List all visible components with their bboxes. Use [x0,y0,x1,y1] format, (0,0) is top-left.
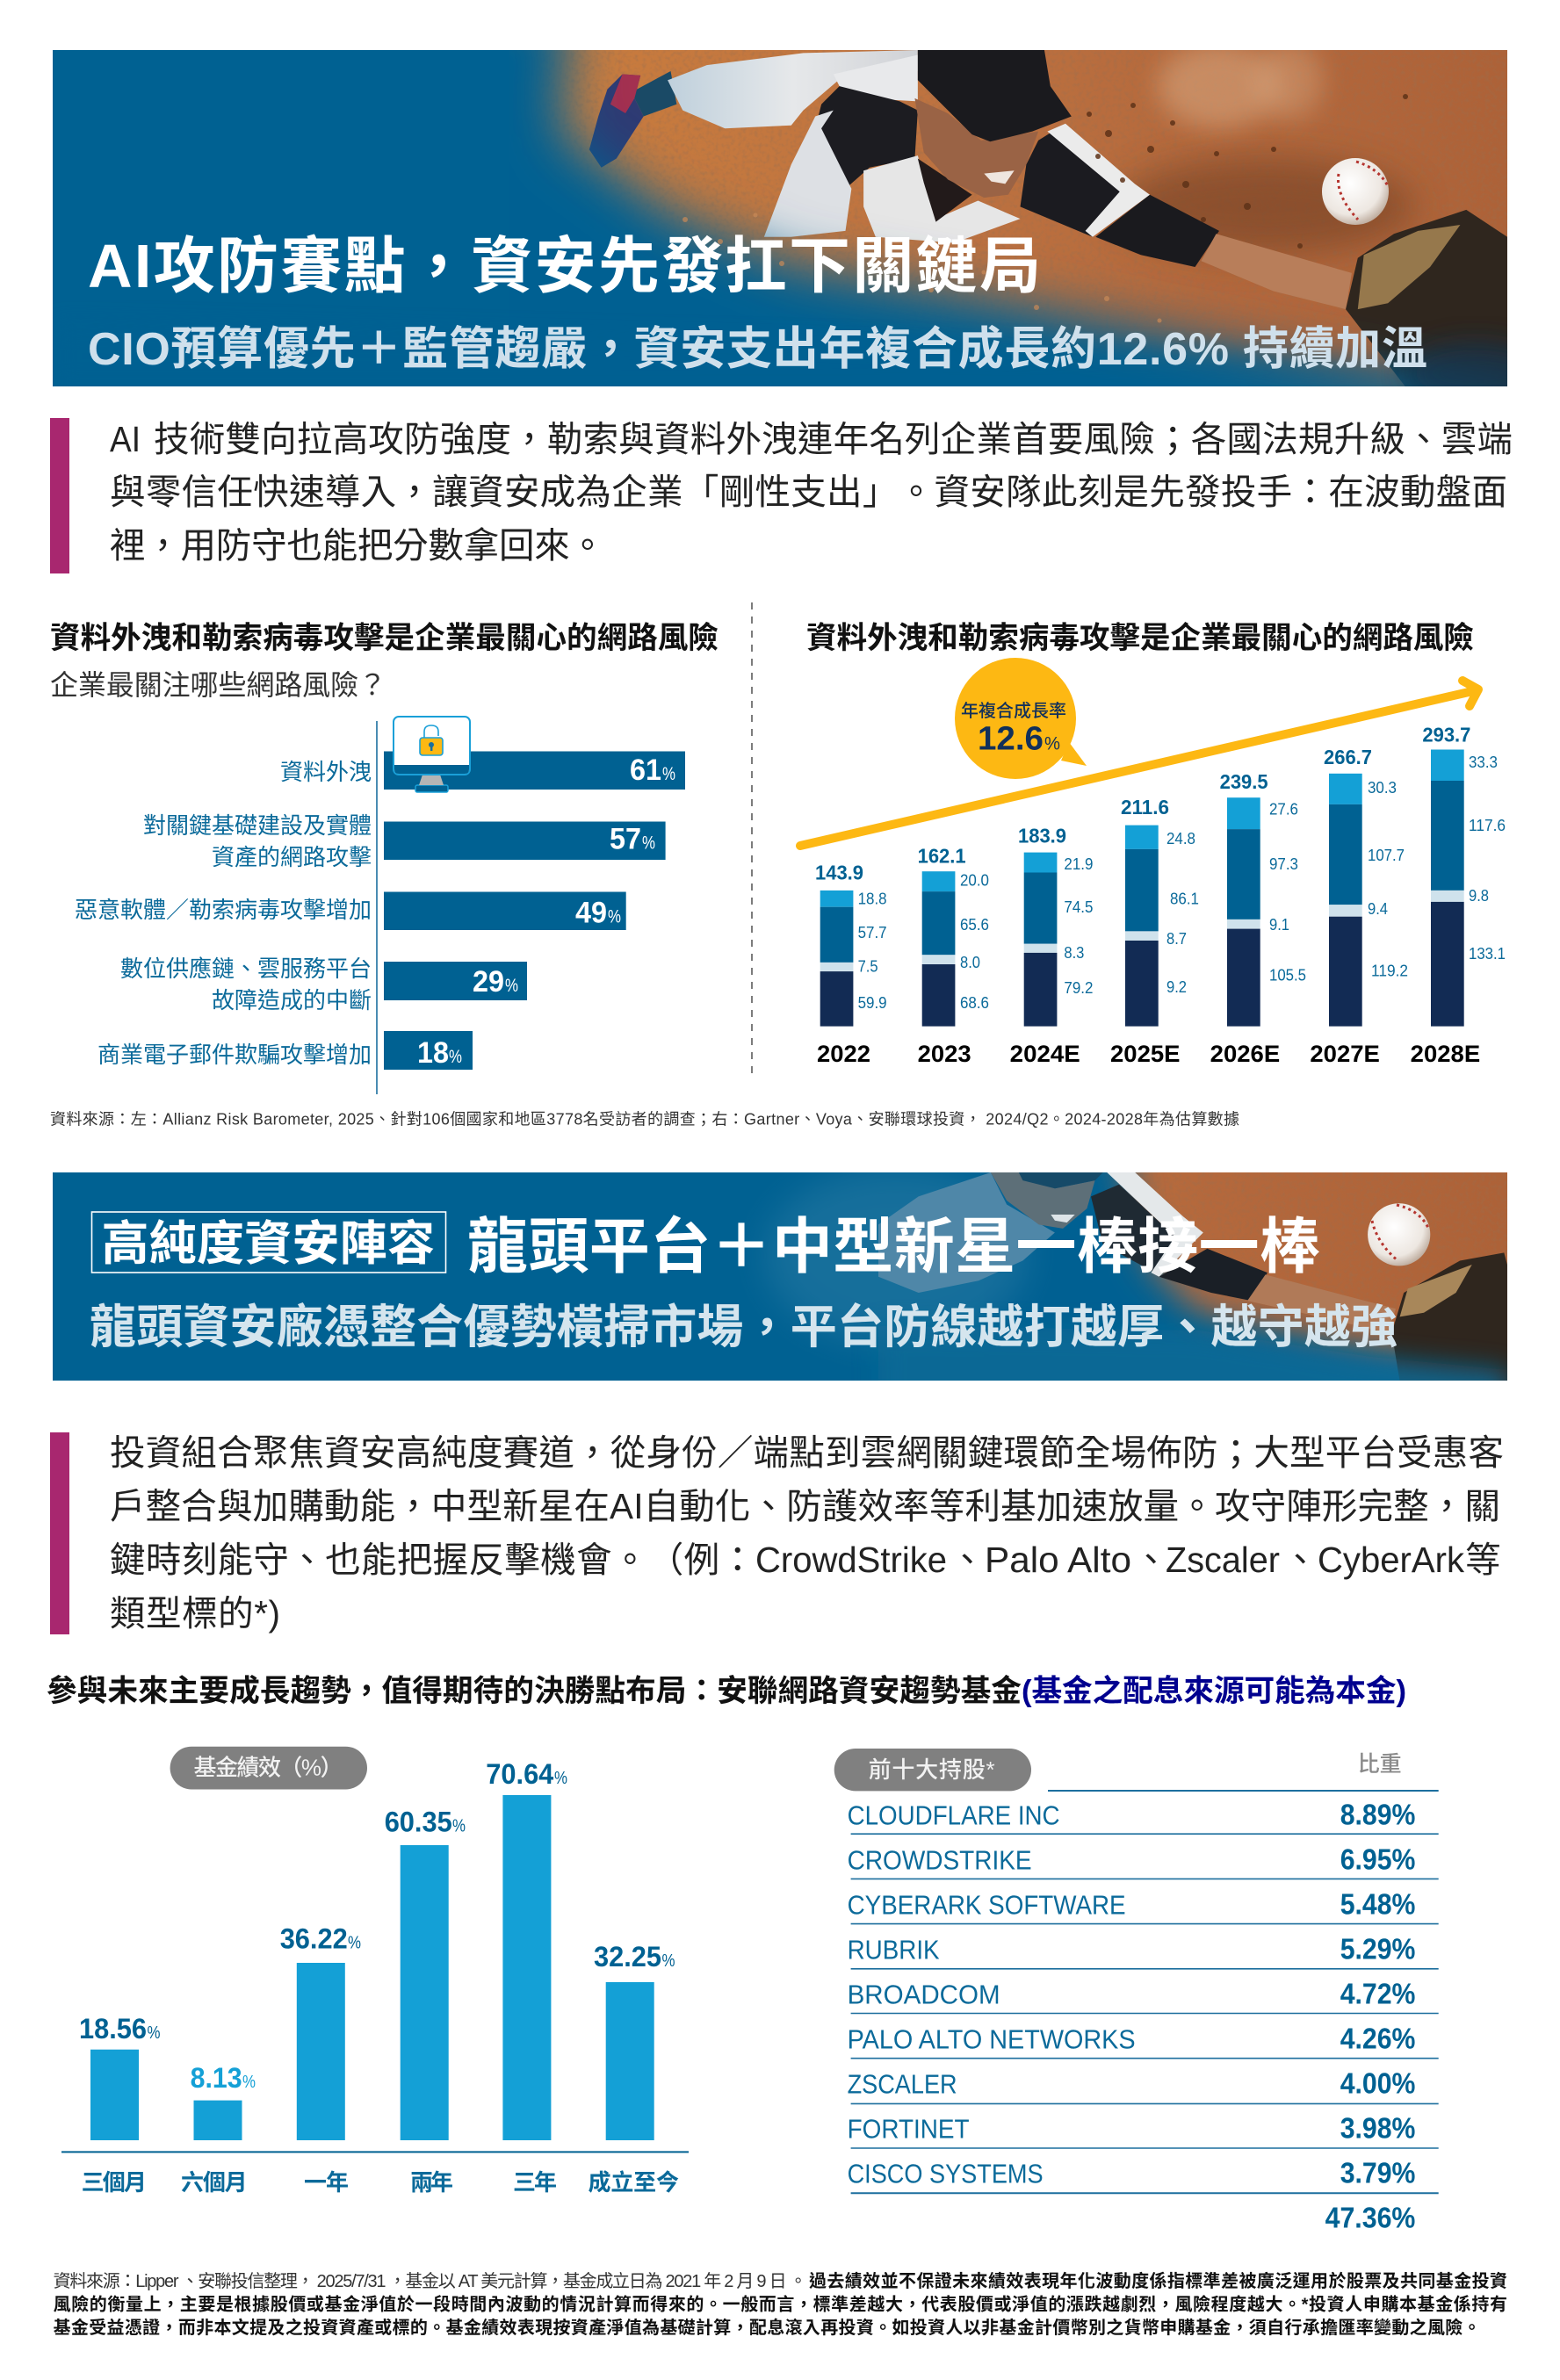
stacked bar 2026E: 239.5 [1220,770,1268,793]
stacked bar 2024E: 21.9 [1064,855,1093,873]
period labels: 兩年 [410,2169,453,2196]
year axis labels: 2022 [817,1041,870,1067]
holding names: CLOUDFLARE INC [848,1800,1060,1830]
period labels: 三個月 [82,2169,147,2196]
bar 成立至今 32.25%: 32.25 [594,1941,661,1973]
bar 兩年 60.35%: % [452,1816,466,1835]
stacked bar 2026E: 9.1 [1269,916,1289,934]
period labels: 六個月 [181,2169,248,2196]
pill: 基金績效: 基金績效（%） [193,1755,343,1781]
intro paragraph: AI [110,419,141,459]
category labels: 惡意軟體／勒索病毒攻擊增加 [75,897,372,923]
bar: 關鍵基礎建設 57%: % [642,833,655,854]
bar 六個月 8.13%: 8.13 [191,2062,242,2094]
stacked bar 2023 [918,844,989,1027]
category labels: 資料外洩 [280,759,372,785]
intro paragraph: CyberArk [1318,1540,1465,1580]
bar 成立至今 32.25%: % [662,1951,675,1971]
period labels: 成立至今 [589,2169,679,2196]
bar: 資料外洩 61% [384,752,685,790]
stacked bar 2025E: 8.7 [1166,930,1187,948]
banner: AI 攻防賽點 hero [53,50,1507,386]
intro text block 2 [50,1432,1504,1634]
holding names: RUBRIK [848,1934,940,1965]
bar 三個月 18.56%: 18.56 [79,2013,147,2045]
stacked bar 2027E: 9.4 [1368,900,1388,918]
intro paragraph: 等 [1465,1540,1500,1580]
footer disclaimer: 基金受益憑證，而非本文提及之投資資產或標的。基金績效表現按資產淨值為基礎計算，配息滾入再投資。如投資人以非基金計價幣別之貨幣申購基金，須自行承擔匯率變動之風險。 [54,2317,1481,2338]
stacked bar 2026E: 105.5 [1269,966,1306,984]
category labels: 資產的網路攻擊 [212,844,372,870]
year axis labels: 2024E [1010,1041,1080,1067]
holding names: FORTINET [848,2113,970,2145]
panel: top ten holdings table [834,1749,1439,2234]
holding weights: 8.89% [1340,1799,1415,1830]
source note 1: 資料來源：左：Allianz Risk Barometer, 2025、針對106個國家和地區3778名受訪者的調查；右：Gartner、Voya、安聯環球投資， 2024/Q2。2024-2028年為估算數據 [50,1110,1239,1128]
footer disclaimer: 資料來源：Lipper 、安聯投信整理， 2025/7/31 ，基金以 AT 美元計算，基金成立日為 2021 年 2 月 9 日 。 [54,2271,807,2291]
bar: 關鍵基礎建設 57%: 57 [610,822,641,855]
panel: fund performance bar chart [61,1747,689,2196]
bar 成立至今 32.25% [594,1941,675,2140]
callout: CAGR 12.6% [955,658,1087,779]
stacked bar 2023: 8.0 [960,954,980,971]
holding weights: 6.95% [1340,1843,1415,1876]
bar 一年 36.22%: % [348,1933,361,1952]
intro paragraph: Zscaler [1166,1540,1280,1580]
section heading: fund: (基金之配息來源可能為本金) [1022,1674,1406,1708]
intro text block 1 [50,418,1513,573]
holding names: CYBERARK SOFTWARE [848,1890,1126,1920]
pill: 基金績效 [170,1747,367,1790]
bar: 資料外洩 61%: 61 [630,754,661,787]
bar: 惡意軟體 49% [384,892,626,930]
stacked bar 2025E: 9.2 [1166,978,1187,996]
panel: risk survey bar chart [50,622,719,1094]
holding names: PALO ALTO NETWORKS [848,2023,1136,2055]
banner title 2: 龍頭平台＋中型新星一棒接一棒 [467,1213,1320,1280]
intro paragraph [110,1432,1504,1634]
bar 三個月 18.56% [79,2013,161,2140]
stacked bar 2028E: 117.6 [1469,817,1506,834]
tag: 高純度資安陣容: 高純度資安陣容 [102,1217,435,1270]
intro paragraph: 類型標的*) [110,1593,280,1634]
icon: monitor with padlock [394,717,470,792]
stacked bar 2022: 143.9 [815,861,863,883]
panel: security spending stacked bar chart [800,622,1506,1067]
stacked bar 2024E: 8.3 [1064,944,1084,962]
bar: 商業電子郵件 18%: % [449,1047,462,1067]
bar: 數位供應鏈 29%: 29 [473,965,504,999]
bar: 商業電子郵件 18% [384,1031,473,1070]
axis line [376,721,378,1094]
stacked bar 2022: 57.7 [858,924,887,941]
banner subtitle: CIO預算優先＋監管趨嚴，資安支出年複合成長約12.6% 持續加溫 [88,324,1427,375]
intro paragraph: 、 [1282,1540,1318,1580]
growth arrow [800,681,1478,846]
banner image: player and ball close-up [53,1172,1507,1381]
footer disclaimer: 風險的衡量上，主要是根據股價或基金淨值於一段時間內波動的情況計算而得來的。一般而言，標準差越大，代表股價或淨值的漲跌越劇烈，風險程度越大。*投資人申購本基金係持有 [54,2294,1507,2315]
intro paragraph: 戶整合與加購動能，中型新星在AI自動化、防護效率等利基加速放量。攻守陣形完整，關 [110,1486,1500,1526]
panel heading right: 資料外洩和勒索病毒攻擊是企業最關心的網路風險 [806,622,1474,655]
bar: 數位供應鏈 29% [384,962,527,1000]
period labels: 三年 [513,2169,557,2196]
bar 兩年 60.35%: 60.35 [385,1806,452,1837]
intro paragraph: 鍵時刻能守、也能把握反擊機會。（例： [110,1540,755,1580]
year axis labels: 2025E [1110,1041,1181,1067]
bar: 惡意軟體 49%: % [608,906,621,927]
footer disclaimer [54,2270,1507,2338]
stacked bar 2027E: 119.2 [1371,962,1408,979]
bar: 關鍵基礎建設 57% [384,822,666,860]
category labels: 商業電子郵件欺騙攻擊增加 [98,1042,372,1068]
year axis labels: 2027E [1310,1041,1380,1067]
stacked bar 2027E [1324,746,1408,1027]
bar 三年 70.64% [486,1758,567,2140]
stacked bar 2028E: 33.3 [1469,754,1498,771]
footer disclaimer: 過去績效並不保證未來績效表現年化波動度係指標準差被廣泛運用於股票及共同基金投資 [809,2270,1507,2291]
stacked bar 2027E: 107.7 [1368,847,1405,864]
section heading: fund: 參與未來主要成長趨勢，值得期待的決勝點布局：安聯網路資安趨勢基金 [47,1674,1022,1708]
bar: 數位供應鏈 29%: % [505,976,518,996]
bar 三個月 18.56%: % [148,2023,161,2043]
category labels: 數位供應鏈、雲服務平台 [120,956,372,982]
bar 一年 36.22%: 36.22 [280,1922,348,1954]
bar: 資料外洩 61%: % [662,764,675,784]
accent bar [50,1432,69,1634]
intro paragraph: 技術雙向拉高攻防強度，勒索與資料外洩連年名列企業首要風險；各國法規升級、雲端 [154,419,1513,459]
category labels [75,759,372,1068]
total weight: 47.36% [1325,2201,1415,2234]
period labels [82,2169,679,2196]
stacked bar 2028E [1422,723,1506,1027]
holding names: BROADCOM [848,1980,1000,2009]
stacked bar 2023: 65.6 [960,916,989,934]
stacked bar 2028E: 9.8 [1469,887,1489,905]
bar 兩年 60.35% [385,1806,466,2140]
period labels: 一年 [304,2169,349,2196]
holding weights: 4.00% [1340,2067,1415,2099]
stacked bar 2026E [1220,770,1306,1027]
panel subheading: 企業最關注哪些網路風險？ [50,669,386,701]
accent bar [50,418,69,573]
stacked bar 2025E [1121,796,1199,1027]
intro paragraph: CrowdStrike [755,1540,947,1580]
intro paragraph: 、 [1133,1540,1168,1580]
stacked bar 2022: 18.8 [858,890,887,907]
year axis labels: 2026E [1210,1041,1280,1067]
stacked bar 2022: 7.5 [858,957,878,975]
stacked bar 2027E: 266.7 [1324,746,1372,768]
banner subtitle 2: 龍頭資安廠憑整合優勢橫掃市場，平台防線越打越厚、越守越強 [90,1302,1398,1353]
stacked bar 2026E: 97.3 [1269,855,1298,873]
holding weights: 5.48% [1340,1888,1415,1920]
holding names [848,1800,1136,2189]
stacked bar 2025E: 211.6 [1121,796,1169,819]
holding weights: 4.26% [1340,2022,1415,2055]
category labels: 故障造成的中斷 [212,987,372,1013]
intro paragraph: 、 [950,1540,986,1580]
holding names: ZSCALER [848,2069,957,2099]
holding weights: 3.98% [1340,2111,1415,2145]
category labels: 對關鍵基礎建設及實體 [143,812,372,839]
section heading: fund [47,1674,1406,1708]
stacked bar 2024E: 79.2 [1064,979,1093,997]
column header: 比重: 比重 [1358,1752,1402,1777]
stacked bar 2028E: 133.1 [1469,945,1506,963]
bar 六個月 8.13% [191,2062,256,2140]
pill: 前十大持股 [834,1749,1031,1791]
bar 六個月 8.13%: % [242,2073,256,2092]
stacked bar 2024E: 183.9 [1018,824,1066,847]
banner image: baseball player diving on dirt [53,50,1507,386]
panel heading left: 資料外洩和勒索病毒攻擊是企業最關心的網路風險 [50,622,719,655]
holding weights: 3.79% [1340,2157,1415,2189]
callout: CAGR 12.6%: 年複合成長率 [961,701,1066,721]
stacked bar 2023: 68.6 [960,994,989,1012]
year axis labels: 2028E [1411,1041,1480,1067]
stacked bar 2028E: 293.7 [1422,723,1470,746]
stacked bar 2024E [1018,824,1093,1027]
stacked bar 2024E: 74.5 [1064,898,1093,916]
bar 三年 70.64%: % [554,1769,567,1788]
pill: 前十大持股: 前十大持股* [869,1756,995,1783]
callout: CAGR 12.6%: 12.6 [978,720,1044,757]
stacked bar 2022 [815,861,887,1027]
intro paragraph: 投資組合聚焦資安高純度賽道，從身份／端點到雲網關鍵環節全場佈防；大型平台受惠客 [110,1432,1504,1473]
intro paragraph: Palo Alto [985,1540,1131,1580]
intro paragraph: 與零信任快速導入，讓資安成為企業「剛性支出」。資安隊此刻是先發投手：在波動盤面 [110,472,1507,512]
intro paragraph: 裡，用防守也能把分數拿回來。 [110,525,605,566]
stacked bar 2027E: 30.3 [1368,779,1397,797]
intro paragraph [110,419,1513,566]
bar 三年 70.64%: 70.64 [486,1758,553,1790]
year axis labels [817,1041,1480,1067]
stacked bar 2025E: 24.8 [1166,830,1195,847]
banner: 高純度資安陣容 [53,1172,1507,1381]
holding names: CISCO SYSTEMS [848,2159,1044,2189]
holding weights [1340,1799,1415,2189]
holding weights: 4.72% [1340,1978,1415,2009]
banner title: AI攻防賽點，資安先發扛下關鍵局 [88,232,1041,300]
stacked bar 2023: 162.1 [918,844,966,867]
holding names: CROWDSTRIKE [848,1844,1032,1876]
stacked bar 2023: 20.0 [960,871,989,889]
callout: CAGR 12.6%: % [1044,734,1060,754]
stacked bar 2026E: 27.6 [1269,800,1298,818]
bar: 惡意軟體 49%: 49 [575,896,607,929]
stacked bar 2022: 59.9 [858,994,887,1012]
stacked bar 2025E: 86.1 [1170,890,1199,907]
bar 一年 36.22% [280,1922,361,2140]
holding weights: 5.29% [1340,1932,1415,1965]
bar: 商業電子郵件 18%: 18 [417,1036,449,1070]
year axis labels: 2023 [918,1041,971,1067]
